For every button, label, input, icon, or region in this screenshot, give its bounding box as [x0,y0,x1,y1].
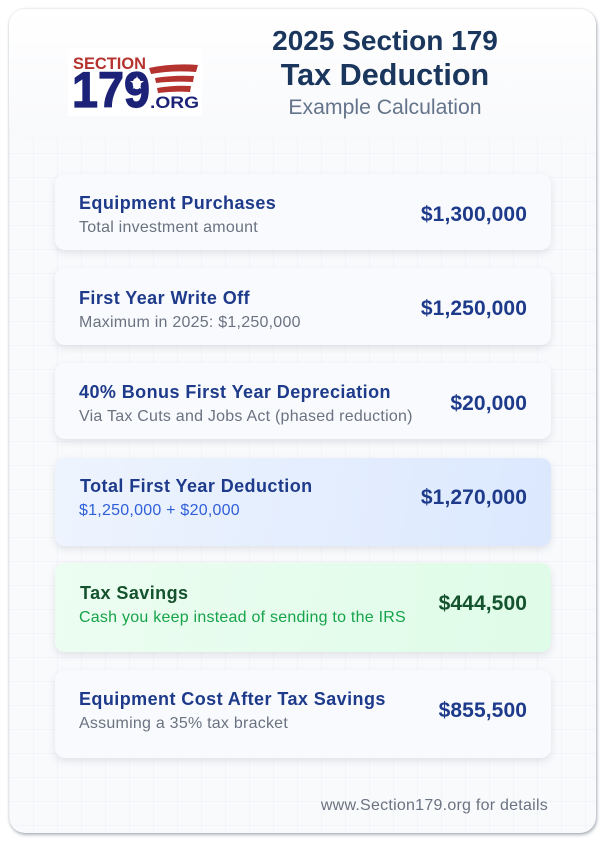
panel: equipment purchases [55,174,551,250]
icon: Section 179 logo: .ORG [150,93,199,112]
label: First Year Write Off [79,288,250,308]
footer note: www.Section179.org for details [321,797,548,814]
panel: tax savings [55,563,551,652]
value: $1,250,000 [421,297,527,320]
description: Via Tax Cuts and Jobs Act (phased reduction) [79,408,413,425]
label: 40% Bonus First Year Depreciation [79,382,391,402]
panel: bonus depreciation [55,363,551,439]
icon: Section 179 logo [72,54,199,116]
label: Tax Savings [80,583,188,603]
title: Tax Deduction [281,58,489,92]
icon: Section 179 logo: SECTION [73,54,146,73]
description: Cash you keep instead of sending to the IRS [79,609,406,626]
title: 2025 Section 179 [272,25,498,56]
label: Equipment Cost After Tax Savings [79,689,386,709]
value: $444,500 [439,592,527,615]
panel: total first year deduction [55,458,551,546]
header panel [9,9,596,138]
label: Equipment Purchases [79,193,276,213]
subtitle: Example Calculation [288,96,482,119]
panel: first year write off [55,268,551,345]
panel: equipment cost after tax savings [55,670,551,758]
value: $20,000 [450,392,527,415]
description: Maximum in 2025: $1,250,000 [79,314,301,331]
value: $855,500 [439,699,527,722]
description: Assuming a 35% tax bracket [79,715,288,732]
value: $1,270,000 [421,486,527,509]
label: Total First Year Deduction [80,476,313,496]
title [272,25,498,92]
value: $1,300,000 [421,203,527,226]
description: Total investment amount [79,219,258,236]
description: $1,250,000 + $20,000 [79,502,240,519]
